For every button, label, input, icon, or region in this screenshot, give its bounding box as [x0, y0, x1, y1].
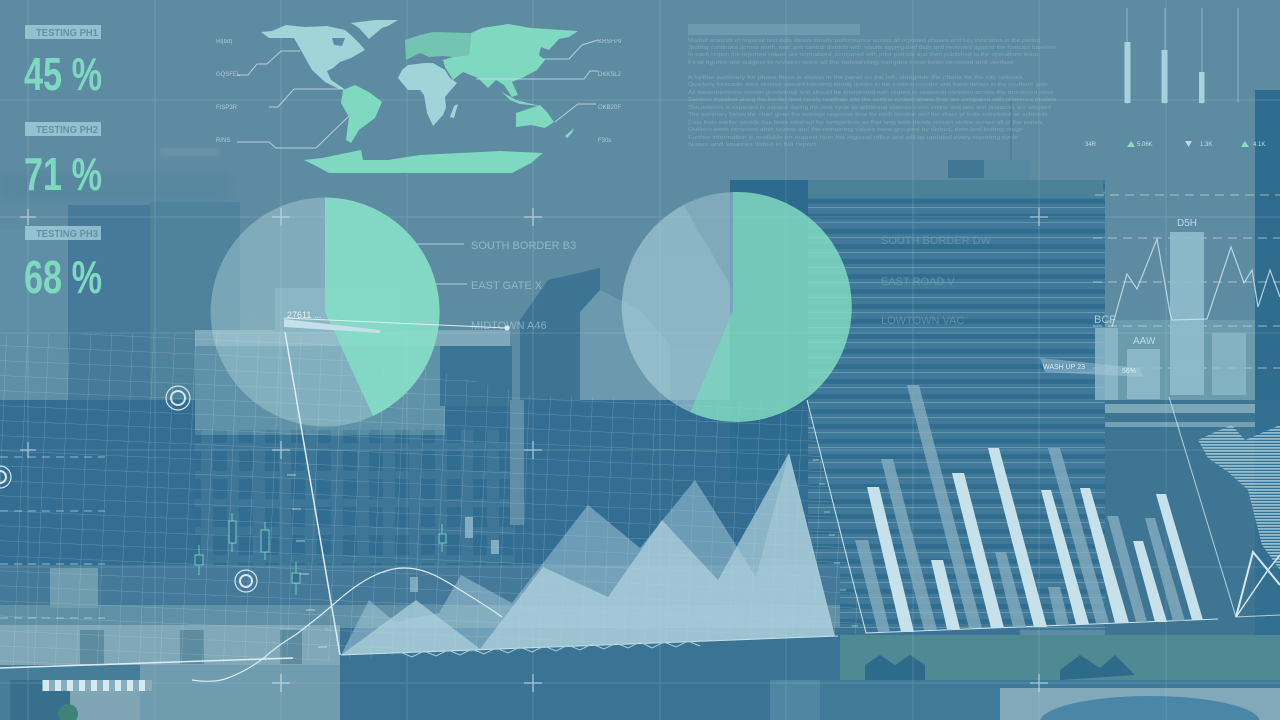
target icons [0, 386, 257, 592]
bar chart right [1094, 218, 1246, 400]
map: North America [261, 25, 365, 90]
callout: pie pointer [284, 310, 510, 333]
left axes [0, 332, 340, 668]
pie chart left labels: MIDTOWN A46 [471, 320, 547, 332]
slanted bar chart [855, 385, 1203, 632]
dashed reference lines [1093, 195, 1280, 368]
callout: wash up: WASH UP 23 [1043, 364, 1085, 371]
map: Europe [405, 32, 471, 60]
callout: wash up [1040, 358, 1143, 377]
callout: wash up: 56% [1122, 368, 1136, 375]
pie chart left labels: EAST GATE X [471, 280, 543, 292]
paragraph text: Notes and sources listed in full report [688, 142, 817, 148]
dashed lines left [0, 457, 105, 618]
right pie labels [881, 235, 992, 327]
bar chart right: BCF [1094, 314, 1116, 326]
paragraph text: Quarterly forecasts were revised upward following strong uptake in the eastern corridor and lower delays in the southern gate [688, 82, 1048, 88]
bar chart right: D5H [1177, 218, 1197, 229]
stat: testing phase 1 [24, 25, 102, 100]
dotted world map fragment [1198, 425, 1280, 570]
paragraph text: The summary below the chart gives the average response time for each location and the share of tests completed on schedule [688, 112, 1048, 118]
map: Australia [516, 105, 554, 128]
paragraph text: Market analysis of regional test data shows steady performance across all reported phases and key indicators in the period [688, 38, 1040, 44]
bar chart right: AAW [1133, 336, 1156, 347]
map: Africa [398, 63, 457, 126]
stat: testing phase 1: 45 % [24, 48, 102, 100]
map labels: R/NS [216, 138, 230, 144]
map labels [216, 39, 622, 144]
perspective grid [0, 320, 860, 680]
paragraph text: Data from earlier rounds has been retained for comparison so that long term trends remain visible across all of the panels [688, 120, 1044, 126]
ticker row: 1.3K [1200, 142, 1212, 148]
map leader lines [237, 40, 598, 148]
bars: dim series [855, 385, 1185, 632]
map: Asia [443, 24, 578, 97]
paragraph text: Outliers were removed after review and the remaining values were grouped by district, date and testing stage [688, 127, 1023, 133]
right pie labels: EAST ROAD V [881, 276, 955, 288]
map labels: KRSFP9 [598, 39, 622, 45]
callout: pie pointer: 27611 ... [287, 310, 321, 320]
map labels: GQSFEL [216, 72, 241, 78]
paragraph text: In each region the reported values are normalised, compared with prior periods and then published to the operations team [688, 52, 1038, 58]
area: back series [341, 453, 835, 655]
map labels: Rl(bd) [216, 39, 232, 45]
paragraph text: Testing continues across north, east and central districts with results aggregated daily and reviewed against the forecast baseline [688, 45, 1056, 51]
map labels: FtSP3R [216, 105, 238, 111]
pie chart left labels [417, 240, 576, 332]
paragraph text: Further information is available on request from the regional office and will be updated every reporting cycle [688, 135, 1018, 141]
map: Greenland [351, 20, 398, 39]
paragraph text: A further summary for phase three is shown in the panel on the left, alongside the charts for the city network [688, 75, 1024, 81]
paragraph text: All measurements remain provisional and should be interpreted with regard to seasonal variation across the monitored sites [688, 90, 1054, 96]
map labels: DKKSLJ [598, 72, 621, 78]
map labels: F30s [598, 138, 611, 144]
right pie labels: SOUTH BORDER DW [881, 235, 992, 247]
stat: testing phase 3: TESTING PH3 [36, 229, 98, 240]
stat: testing phase 2: TESTING PH2 [36, 125, 98, 136]
ticker row: 4.1K [1253, 142, 1265, 148]
paragraph text [688, 38, 1057, 148]
stat: testing phase 3: 68 % [24, 251, 102, 303]
pie chart right [622, 192, 852, 422]
stat: testing phase 3 [24, 226, 102, 303]
right pie labels: LOWTOWN VAC [881, 315, 964, 327]
line chart right [1112, 239, 1280, 327]
awning stripes [42, 680, 152, 691]
bars: bright series [867, 448, 1203, 632]
paragraph text: Sensors installed along the border feed hourly readings into the central system where they are compared with reference models [688, 97, 1057, 103]
pie chart left [211, 197, 440, 426]
small triangle chart [1236, 552, 1280, 617]
candlesticks lower [195, 513, 499, 630]
stat: testing phase 1: TESTING PH1 [36, 28, 98, 39]
area chart [341, 453, 838, 657]
text block [688, 24, 1057, 148]
ticker row [1085, 141, 1265, 148]
crosshair markers [20, 208, 1048, 692]
map: South America [341, 85, 382, 143]
area: front series [341, 453, 835, 655]
world map [261, 20, 578, 173]
ticker row: 5.06K [1137, 142, 1153, 148]
ticker row: 34R [1085, 142, 1097, 148]
bell curve [192, 568, 502, 681]
stat: testing phase 2: 71 % [24, 148, 102, 200]
stat: testing phase 2 [24, 122, 102, 200]
pie chart left labels: SOUTH BORDER B3 [471, 240, 576, 252]
paragraph text: The network is expected to expand during the next cycle as additional stations come online and new test protocols are adopted [688, 105, 1051, 111]
map: Indonesia and islands [502, 92, 540, 106]
candlestick chart top right [1124, 8, 1238, 104]
map labels: OKB20F [598, 105, 621, 111]
map: Antarctica [304, 150, 543, 173]
paragraph text: Final figures are subject to revision once all the outstanding samples have been received and verified [688, 60, 1013, 66]
slanted bar chart axes [807, 397, 1280, 633]
